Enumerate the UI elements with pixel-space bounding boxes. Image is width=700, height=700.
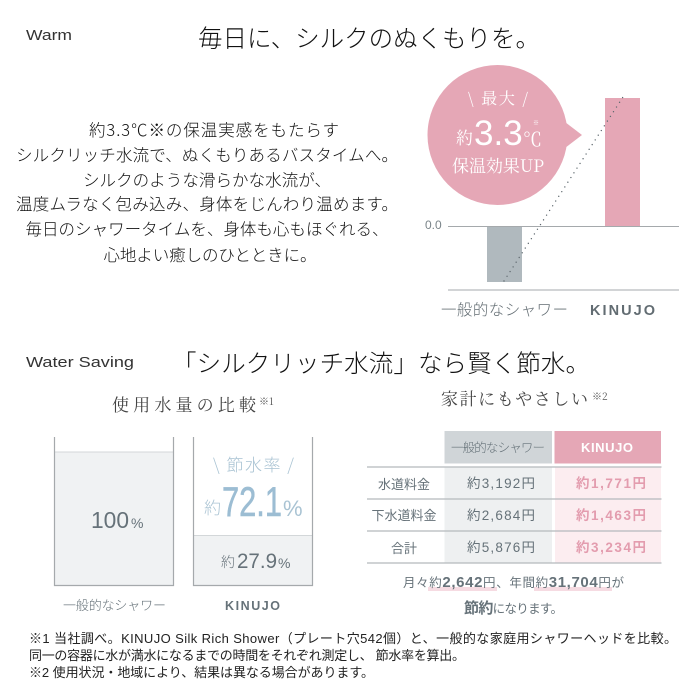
axis bottom line (448, 289, 679, 291)
chart: warmth bar chart (425, 97, 679, 320)
savings highlight underlines (428, 587, 497, 591)
row: total (391, 539, 646, 556)
footnotes: ※2 使用状況・地域により、結果は異なる場合があります。 (29, 665, 374, 680)
title: water saving: 「シルクリッチ水流」なら賢く節水。 (172, 345, 590, 380)
text block: warm description: 約3.3℃※の保温実感をもたらす (89, 117, 339, 141)
callout: 3.3 degree bubble: 3.3 (474, 114, 523, 153)
container: KINUJO: \ 節水率 / (213, 451, 294, 476)
row: total: 約5,876円 (467, 540, 535, 555)
label: general shower: 一般的なシャワー (63, 595, 166, 614)
table header: general shower: 一般的なシャワー (451, 437, 545, 456)
text block: warm description: 毎日のシャワータイムを、身体も心もほぐれる、 (26, 216, 388, 240)
footnote mark 1: ※1 (259, 393, 274, 408)
container: KINUJO: 72.1 (222, 478, 282, 525)
footnotes (29, 631, 677, 680)
row: sewage fee: 約1,463円 (576, 507, 646, 523)
label: Warm: Warm (26, 27, 72, 44)
panel: water usage comparison (54, 391, 312, 614)
label: KINUJO: KINUJO (225, 599, 280, 613)
text: savings summary: 月々約2,642円、年間約31,704円が (403, 574, 624, 591)
panel: household cost table (367, 385, 662, 617)
table header: general shower (444, 431, 552, 464)
container: KINUJO: 約 (221, 552, 235, 572)
footnotes: 同一の容器に水が満水になるまでの時間をそれぞれ測定し、 節水率を算出。 (29, 648, 465, 663)
row: water fee (378, 475, 646, 492)
row: sewage fee: 約2,684円 (467, 508, 535, 523)
callout: 3.3 degree bubble: 約 (456, 124, 473, 149)
row: water fee: 水道料金 (378, 477, 430, 492)
text block: warm description (16, 117, 398, 266)
heading: household cost: 家計にもやさしい (441, 385, 588, 410)
row: sewage fee (372, 507, 646, 523)
container: KINUJO: % (283, 496, 303, 521)
row: sewage fee: 下水道料金 (372, 508, 436, 523)
text block: warm description: 温度ムラなく包み込み、身体をじんわり温めます。 (16, 191, 398, 215)
table header: KINUJO: KINUJO (581, 440, 633, 455)
container: KINUJO: % (278, 555, 290, 571)
row: water fee: 約3,192円 (467, 476, 535, 491)
container: KINUJO: 27.9 (237, 550, 277, 573)
title: warm: 毎日に、シルクのぬくもりを。 (198, 20, 540, 55)
container: general shower: % (131, 515, 143, 531)
heading: water usage: 使用水量の比較 (112, 391, 257, 416)
row: water fee: 約1,771円 (576, 475, 646, 491)
callout: 3.3 degree bubble: ※ (533, 120, 539, 127)
text block: warm description: 心地よい癒しのひとときに。 (104, 242, 316, 266)
callout: 3.3 degree bubble: \ 最大 / (468, 86, 528, 109)
callout: 3.3 degree bubble: ℃ (523, 125, 542, 152)
label: Water Saving: Water Saving (26, 354, 134, 371)
container: general shower (54, 437, 174, 586)
row: total: 合計 (391, 541, 417, 556)
callout: 3.3 degree bubble (428, 65, 582, 205)
container: general shower: 100 (91, 507, 129, 533)
axis label 0.0: 0.0 (425, 218, 442, 232)
axis label general shower: 一般的なシャワー (441, 298, 568, 320)
text: savings summary: 節約になります。 (464, 599, 563, 617)
axis label KINUJO: KINUJO (590, 303, 655, 319)
bar: KINUJO (605, 98, 640, 227)
trend dotted line (504, 97, 623, 281)
footnotes: ※1 当社調べ。KINUJO Silk Rich Shower（プレート穴542個）と、一般的な家庭用シャワーヘッドを比較。 (29, 631, 677, 646)
container: KINUJO (194, 437, 312, 586)
container: KINUJO: 約 (204, 494, 221, 519)
callout: 3.3 degree bubble: 保温効果UP (452, 152, 544, 177)
bar: general shower (487, 227, 522, 282)
text block: warm description: シルクリッチ水流で、ぬくもりあるバスタイムへ。 (16, 142, 398, 166)
table header: KINUJO (554, 431, 661, 464)
row: total: 約3,234円 (576, 539, 646, 555)
text block: warm description: シルクのような滑らかな水流が、 (83, 167, 331, 191)
text: savings summary (403, 574, 624, 617)
column fills (444, 467, 552, 563)
footnote mark 2: ※2 (592, 388, 608, 403)
axis zero line (448, 226, 679, 228)
